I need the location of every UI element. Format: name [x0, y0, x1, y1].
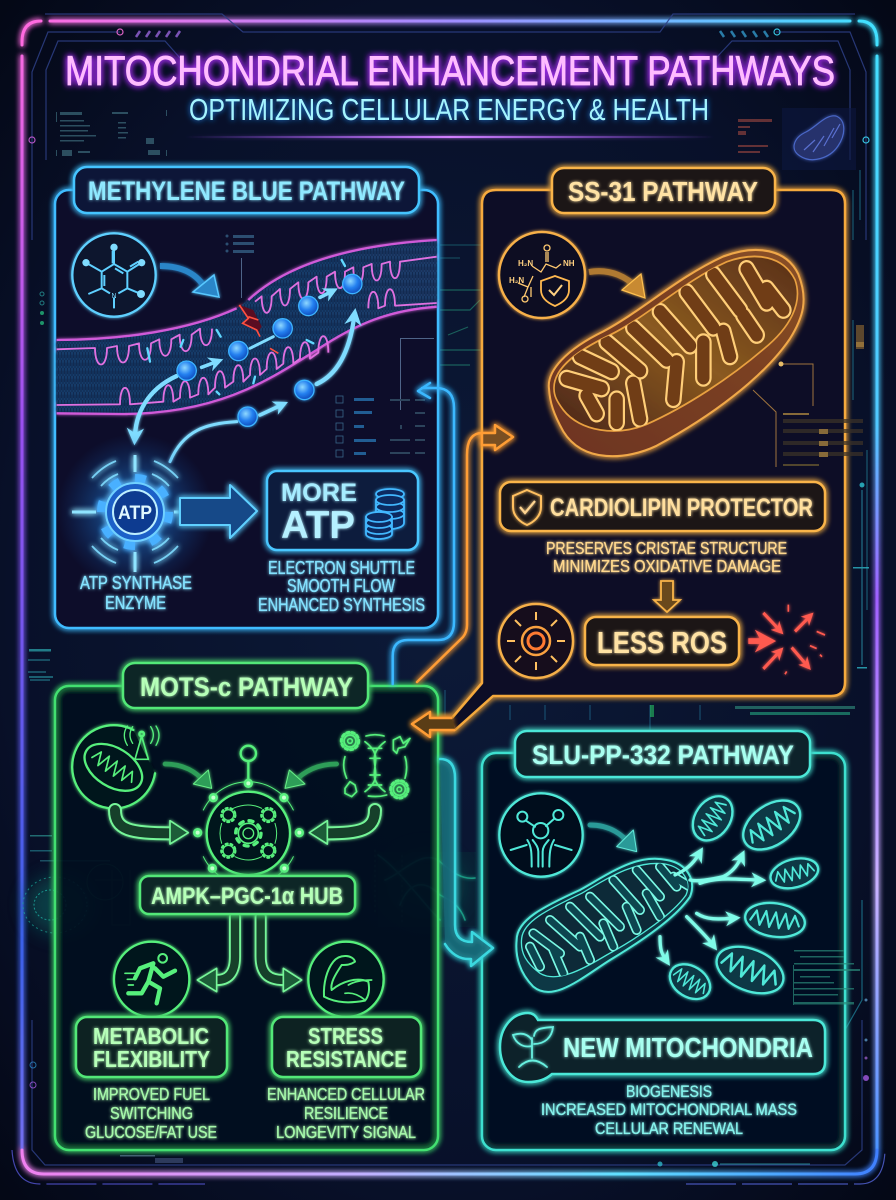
- panel: SLU-PP-332 pathway: [482, 731, 860, 1150]
- text: metabolic benefits: IMPROVED FUEL: [93, 1084, 210, 1104]
- HUD chart in teal panel: [793, 950, 860, 1005]
- text: biogenesis benefits: INCREASED MITOCHONDRIAL MASS: [541, 1100, 797, 1119]
- arrow: lower left to hub: [115, 810, 172, 833]
- diagram: signal to hub: [72, 725, 410, 1017]
- callout: More ATP: [267, 471, 418, 550]
- HUD details in blue panel: [226, 234, 434, 457]
- illustration: SS-31 mitochondrion: [549, 250, 804, 456]
- icon: ATP synthase gear: ATP: [118, 503, 152, 524]
- callout: Less ROS: LESS ROS: [597, 625, 727, 660]
- arrow: molecule to membrane: [160, 266, 219, 297]
- HUD chart near mitochondrion: [783, 413, 863, 466]
- callout: Stress Resistance: STRESS: [308, 1023, 383, 1049]
- callout: Stress Resistance: [272, 1017, 421, 1077]
- text: biogenesis benefits: [541, 1082, 797, 1138]
- arrow: down to less ROS: [654, 581, 680, 612]
- arrow: SS-31 molecule to mitochondrion: [589, 271, 645, 298]
- background cell glow: left: [23, 860, 130, 935]
- callout lines on mitochondrion: [753, 362, 813, 467]
- text: ATP synthase enzyme: [80, 573, 192, 613]
- icon: mitochondrion signal: [72, 725, 159, 808]
- icon: runner: [114, 942, 189, 1017]
- icon: flexed arm: [308, 942, 384, 1017]
- icon: SS-31 molecule with shield: H₂N: [518, 259, 533, 268]
- arrows: hub to outcomes: [197, 917, 302, 992]
- heading: SS-31: [552, 168, 775, 213]
- icon: methylene blue molecule: [72, 233, 156, 317]
- background circuit traces: [28, 170, 867, 1120]
- heading: SS-31: SS-31 PATHWAY: [568, 176, 758, 207]
- HUD: top left data block: [56, 110, 167, 156]
- heading: MOTS-c: [123, 663, 368, 708]
- callout: New Mitochondria: NEW MITOCHONDRIA: [563, 1032, 813, 1063]
- callout: Stress Resistance: RESISTANCE: [286, 1046, 407, 1072]
- panel border: [482, 753, 845, 1150]
- icon: SS-31 molecule with shield: H₂N: [509, 276, 524, 285]
- panel: Methylene Blue pathway: [55, 167, 438, 628]
- panel border with arrow tail: [412, 190, 845, 737]
- mitochondrial biogenesis illustration: [499, 789, 821, 1006]
- HUD: top right mitochondrion scan: [738, 108, 856, 170]
- connector: MOTS-c to SLU-PP-332 arrow: [440, 759, 493, 966]
- text: biogenesis benefits: CELLULAR RENEWAL: [595, 1119, 743, 1138]
- callout: Metabolic Flexibility: [76, 1017, 227, 1077]
- daughter mitochondria: [663, 789, 821, 1006]
- text: stress benefits: LONGEVITY SIGNAL: [276, 1122, 416, 1142]
- text: electron shuttle benefits: SMOOTH FLOW: [287, 576, 395, 596]
- callout: More ATP: MORE: [281, 479, 357, 507]
- icon: ATP synthase gear: [57, 434, 213, 590]
- text: electron shuttle benefits: [258, 558, 425, 615]
- arrow: SS-31 to MOTS-c head: [412, 712, 455, 737]
- icon: SLU-PP-332 receptor: [499, 793, 583, 877]
- text: metabolic benefits: [85, 1084, 217, 1142]
- arrow: lower right to hub: [327, 810, 375, 833]
- heading: Methylene Blue: [74, 167, 419, 213]
- callout: Metabolic Flexibility: METABOLIC: [93, 1023, 209, 1049]
- arrow: top left to hub: [165, 764, 205, 783]
- heading: Methylene Blue: METHYLENE BLUE PATHWAY: [88, 176, 405, 206]
- text: stress benefits: [267, 1084, 425, 1142]
- callout: Less ROS: [585, 617, 739, 665]
- text: stress benefits: RESILIENCE: [304, 1103, 388, 1123]
- icon: shield: [513, 490, 541, 525]
- text: metabolic benefits: SWITCHING: [110, 1103, 193, 1123]
- text: ATP synthase enzyme: ENZYME: [105, 593, 166, 613]
- title underline: [185, 136, 715, 138]
- text: ATP synthase enzyme: ATP SYNTHASE: [80, 573, 192, 593]
- text: electron shuttle benefits: ELECTRON SHUTTLE: [268, 558, 415, 578]
- icon: SS-31 molecule with shield: [499, 232, 585, 318]
- callout: More ATP: ATP: [281, 504, 355, 547]
- main mitochondrion: [516, 859, 692, 992]
- connector: MOTS-c to SS-31 arrow: [417, 425, 513, 682]
- heading: SLU-PP-332: [515, 731, 810, 777]
- panel border: [55, 190, 438, 628]
- heading: SLU-PP-332: SLU-PP-332 PATHWAY: [532, 740, 794, 770]
- text: metabolic benefits: GLUCOSE/FAT USE: [85, 1122, 217, 1142]
- callout: Cardiolipin Protector: CARDIOLIPIN PROTECTOR: [550, 494, 813, 522]
- membrane with cristae and electrons: [57, 240, 437, 462]
- background wisp glow: right: [375, 849, 476, 927]
- connector: MOTS-c to Methylene Blue arrow: [393, 383, 454, 684]
- text: SS-31 benefits: PRESERVES CRISTAE STRUCTURE: [546, 538, 787, 558]
- text: SS-31 benefits: [546, 538, 787, 576]
- panel border: [55, 686, 438, 1150]
- subtitle: OPTIMIZING CELLULAR ENERGY & HEALTH: [189, 92, 709, 127]
- heading: MOTS-c: MOTS-c PATHWAY: [140, 672, 353, 702]
- callout: New Mitochondria: [500, 1013, 825, 1082]
- arrow: receptor to main mitochondrion: [590, 825, 630, 845]
- arrow: ATP synthase to More ATP: [180, 485, 257, 538]
- text: stress benefits: ENHANCED CELLULAR: [267, 1084, 425, 1104]
- text: electron shuttle benefits: ENHANCED SYNTHESIS: [258, 595, 425, 615]
- icon: SS-31 molecule with shield: NH: [563, 259, 575, 268]
- hub label: [140, 876, 355, 914]
- arrow: top right to hub: [293, 764, 337, 783]
- icon: red burst arrows: [748, 605, 825, 674]
- hub label: AMPK–PGC-1α HUB: [151, 883, 343, 910]
- icon: AMPK hub: [194, 746, 303, 885]
- icon: methylene blue molecule: N: [111, 293, 117, 300]
- branching arrows: [660, 855, 757, 958]
- text: biogenesis benefits: BIOGENESIS: [626, 1082, 712, 1101]
- text: SS-31 benefits: MINIMIZES OXIDATIVE DAMAGE: [553, 556, 781, 576]
- icon: DNA and gears: [341, 732, 410, 798]
- icon: sprout: [513, 1027, 553, 1067]
- icon: ROS sun: [499, 604, 573, 678]
- panel: MOTS-c pathway: [55, 663, 438, 1150]
- callout: Cardiolipin Protector: [500, 482, 825, 531]
- panel: SS-31 pathway: [412, 168, 863, 737]
- icon: coin stack: [366, 489, 404, 539]
- HUD: side readouts: [29, 292, 869, 1167]
- callout: Metabolic Flexibility: FLEXIBILITY: [93, 1046, 210, 1072]
